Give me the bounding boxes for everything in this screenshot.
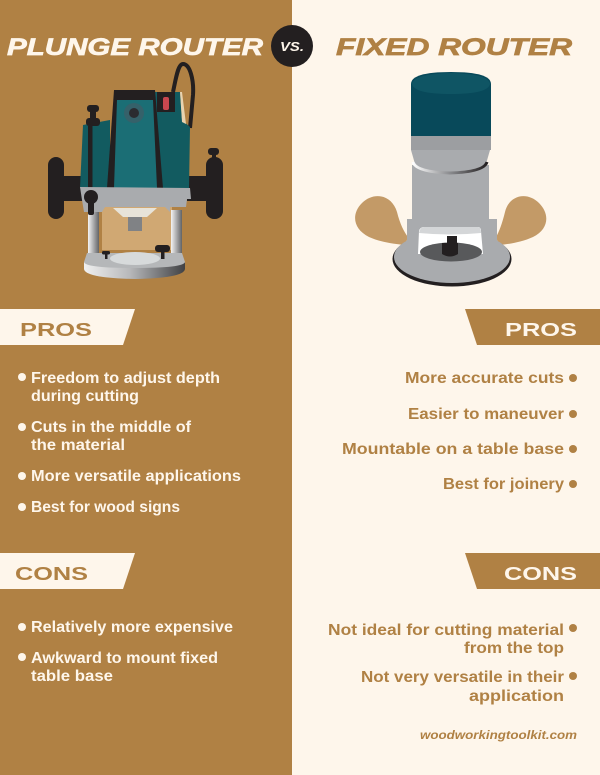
list: plunge cons xyxy=(18,619,233,685)
list: fixed pros: Easier to maneuver xyxy=(408,406,564,423)
source credit: woodworkingtoolkit.com xyxy=(420,728,577,742)
panel: fixed router background xyxy=(292,0,600,775)
list: fixed pros: More accurate cuts xyxy=(405,370,564,387)
list: fixed cons: application xyxy=(469,688,564,705)
banner: plunge pros xyxy=(0,309,135,345)
list: fixed cons: from the top xyxy=(464,640,564,657)
illustration: fixed router xyxy=(355,72,546,286)
list: plunge pros: Freedom to adjust depth xyxy=(31,370,220,387)
list: plunge pros: More versatile applications xyxy=(31,468,241,485)
vs badge xyxy=(271,25,313,67)
banner: fixed cons xyxy=(465,553,600,589)
list: plunge cons: Awkward to mount fixed xyxy=(31,650,218,667)
banner: plunge pros: PROS xyxy=(20,320,92,340)
vs badge: VS. xyxy=(280,39,304,54)
title: plunge router: PLUNGE ROUTER xyxy=(7,34,264,61)
banner: plunge cons: CONS xyxy=(15,564,88,584)
title: fixed router: FIXED ROUTER xyxy=(336,34,573,61)
list: plunge pros: Best for wood signs xyxy=(31,499,180,516)
list: fixed pros: Best for joinery xyxy=(443,476,564,493)
list: fixed cons: Not ideal for cutting material xyxy=(328,622,564,639)
list: fixed pros: Mountable on a table base xyxy=(342,441,564,458)
list: plunge pros: during cutting xyxy=(31,388,139,405)
illustration: plunge router xyxy=(48,64,223,279)
list: plunge pros: the material xyxy=(31,437,125,454)
list: fixed pros xyxy=(342,370,577,493)
banner: fixed pros: PROS xyxy=(505,320,577,340)
list: plunge pros: Cuts in the middle of xyxy=(31,419,192,436)
list: fixed cons: Not very versatile in their xyxy=(361,669,564,686)
banner: fixed pros xyxy=(465,309,600,345)
banner: plunge cons xyxy=(0,553,135,589)
banner: fixed cons: CONS xyxy=(504,564,577,584)
list: plunge pros xyxy=(18,370,241,516)
list: plunge cons: Relatively more expensive xyxy=(31,619,233,636)
panel: plunge router background xyxy=(0,0,292,775)
list: fixed cons xyxy=(328,622,577,705)
list: plunge cons: table base xyxy=(31,668,113,685)
